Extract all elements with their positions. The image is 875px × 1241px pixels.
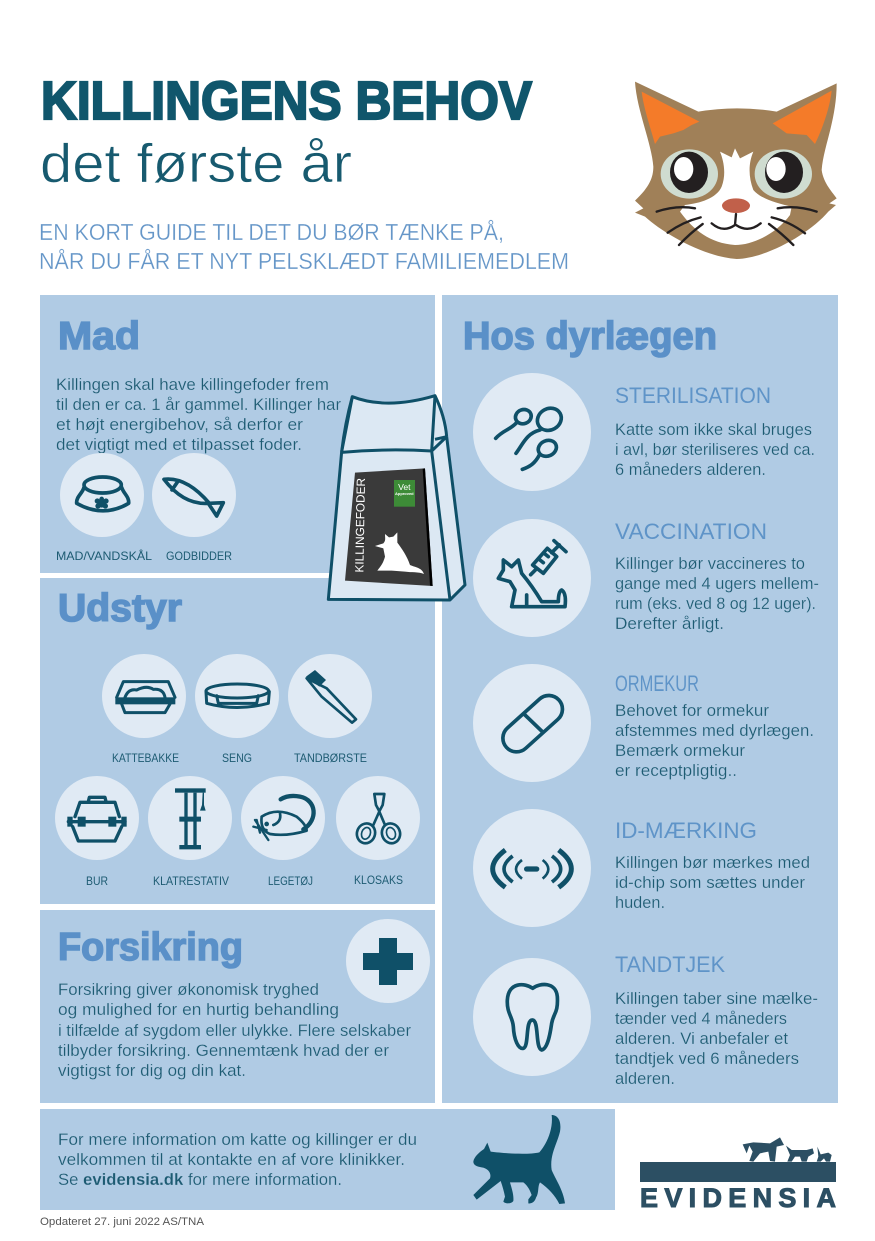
- text: mad: et højt energibehov, så derfor er: [56, 416, 304, 434]
- text: sterilisation: [615, 421, 815, 479]
- logo: evidensia: EVIDENSIA: [640, 1183, 836, 1213]
- panel: footer contact: [40, 1109, 615, 1210]
- text: vaccination: gange med 4 ugers mellem-: [615, 575, 819, 593]
- labels: equipment row 2: BUR: [86, 874, 108, 888]
- illustration: food bag: Vet: [398, 482, 411, 492]
- labels: equipment row 1: KATTEBAKKE: [112, 751, 179, 765]
- labels: equipment row 1: SENG: [222, 751, 252, 765]
- title: det første år: [40, 132, 352, 194]
- subtitle: NÅR DU FÅR ET NYT PELSKLÆDT FAMILIEMEDLEM: [39, 247, 569, 274]
- icon: fish: [152, 453, 236, 537]
- heading: forsikring: Forsikring: [58, 926, 243, 969]
- heading: tandtjek: TANDTJEK: [615, 952, 725, 977]
- text: forsikring: tilbyder forsikring. Gennemtænk hvad der er: [58, 1042, 390, 1060]
- text: id-mærking: huden.: [615, 894, 665, 912]
- text: contact: [58, 1131, 417, 1189]
- text: tandtjek: [615, 990, 818, 1088]
- heading: ormekur: ORMEKUR: [615, 671, 699, 696]
- icon: food bowl: [60, 453, 144, 537]
- panel: udstyr: [40, 578, 435, 904]
- panel: mad: [40, 295, 435, 573]
- subtitle: EN KORT GUIDE TIL DET DU BØR TÆNKE PÅ,: [39, 218, 504, 245]
- text: sterilisation: i avl, bør steriliseres ved ca.: [615, 441, 815, 459]
- text: vaccination: [615, 555, 819, 633]
- text: contact: velkommen til at kontakte en af vore klinikker.: [58, 1151, 405, 1169]
- icon: toy mouse: [241, 776, 325, 860]
- heading: id-mærking: ID-MÆRKING: [615, 818, 757, 843]
- icon: plus: [346, 919, 430, 1003]
- text: vaccination: rum (eks. ved 8 og 12 uger).: [615, 595, 816, 613]
- heading: mad: Mad: [58, 315, 140, 358]
- text: ormekur: [615, 702, 814, 780]
- panel: hos dyrlægen: [442, 295, 838, 1103]
- icon: tooth: [473, 958, 591, 1076]
- illustration: food bag: Approved: [395, 491, 414, 496]
- labels: equipment row 2: KLATRESTATIV: [153, 874, 229, 888]
- text: tandtjek: tandtjek ved 6 måneders: [615, 1050, 799, 1068]
- text: forsikring: og mulighed for en hurtig behandling: [58, 1001, 339, 1019]
- text: forsikring: Forsikring giver økonomisk tryghed: [58, 981, 319, 999]
- icon: cat tree: [148, 776, 232, 860]
- text: tandtjek: alderen. Vi anbefaler et: [615, 1030, 788, 1048]
- title: [40, 71, 532, 194]
- icon: bed: [195, 654, 279, 738]
- icon: carrier: [55, 776, 139, 860]
- text: contact: For mere information om katte og killinger er du: [58, 1131, 417, 1149]
- subtitle: [39, 218, 569, 274]
- text: mad: til den er ca. 1 år gammel. Killinger har: [56, 396, 341, 414]
- illustration: cat face: [635, 82, 837, 259]
- text: mad: Killingen skal have killingefoder frem: [56, 376, 329, 394]
- icon: id chip: [473, 809, 591, 927]
- icon: cat with syringe: [473, 519, 591, 637]
- text: mad: det vigtigt med et tilpasset foder.: [56, 436, 302, 454]
- heading: udstyr: Udstyr: [58, 587, 182, 630]
- text: contact: Se evidensia.dk for mere information.: [58, 1171, 342, 1189]
- icon: walking cat: [473, 1115, 565, 1204]
- labels: equipment row 2: LEGETØJ: [268, 874, 313, 888]
- text: ormekur: afstemmes med dyrlægen.: [615, 722, 814, 740]
- icon: sperm: [473, 373, 591, 491]
- labels: mad icons: [56, 548, 232, 563]
- heading: sterilisation: STERILISATION: [615, 383, 771, 408]
- labels: equipment row 2: KLOSAKS: [354, 873, 403, 887]
- text: ormekur: Behovet for ormekur: [615, 702, 770, 720]
- text: ormekur: Bemærk ormekur: [615, 742, 746, 760]
- labels: mad icons: MAD/VANDSKÅL: [56, 548, 152, 563]
- labels: equipment row 1: [112, 751, 367, 765]
- heading: hos dyrlægen: Hos dyrlægen: [463, 315, 717, 358]
- labels: mad icons: GODBIDDER: [166, 549, 232, 563]
- text: vaccination: Derefter årligt.: [615, 615, 724, 633]
- text: vaccination: Killinger bør vaccineres to: [615, 555, 805, 573]
- heading: vaccination: VACCINATION: [615, 519, 767, 544]
- logo: evidensia: [640, 1137, 836, 1213]
- text: sterilisation: 6 måneders alderen.: [615, 461, 766, 479]
- text: ormekur: er receptpligtig..: [615, 762, 737, 780]
- update note: Opdateret 27. juni 2022 AS/TNA: [40, 1216, 205, 1228]
- text: forsikring: vigtigst for dig og din kat.: [58, 1062, 246, 1080]
- text: tandtjek: alderen.: [615, 1070, 675, 1088]
- text: mad: [56, 376, 341, 454]
- text: sterilisation: Katte som ikke skal bruges: [615, 421, 812, 439]
- text: forsikring: i tilfælde af sygdom eller ulykke. Flere selskaber: [58, 1022, 411, 1040]
- title: KILLINGENS BEHOV: [41, 71, 532, 131]
- text: forsikring: [58, 981, 411, 1080]
- icon: litter box: [102, 654, 186, 738]
- icon: nail clippers: [336, 776, 420, 860]
- illustration: food bag: KILLINGEFODER: [352, 477, 368, 573]
- text: tandtjek: Killingen taber sine mælke-: [615, 990, 818, 1008]
- text: id-mærking: [615, 854, 810, 912]
- illustration: food bag: [328, 396, 465, 600]
- icon: pill: [473, 664, 591, 782]
- text: id-mærking: Killingen bør mærkes med: [615, 854, 810, 872]
- panel: forsikring: [40, 910, 435, 1103]
- labels: equipment row 2: [86, 873, 403, 888]
- text: tandtjek: tænder ved 4 måneders: [615, 1010, 787, 1028]
- text: id-mærking: id-chip som sættes under: [615, 874, 806, 892]
- labels: equipment row 1: TANDBØRSTE: [294, 751, 367, 765]
- icon: toothbrush: [288, 654, 372, 738]
